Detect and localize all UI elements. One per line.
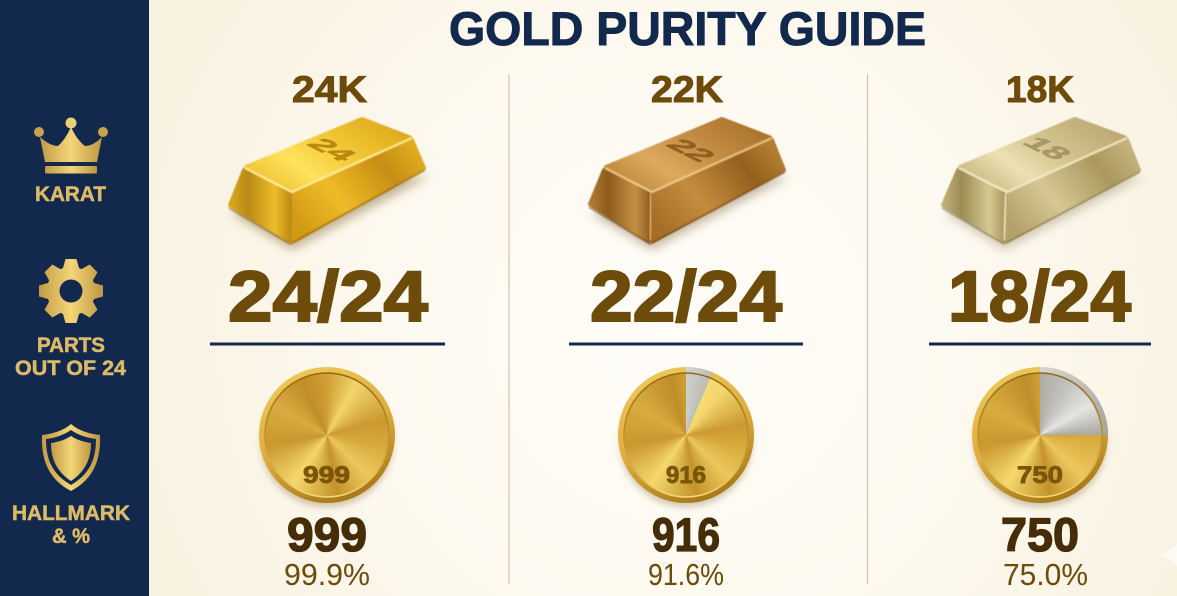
coin: 916 [618,367,754,507]
icon: 22K gold bar [589,119,790,250]
icon: shield [42,424,100,491]
fraction: 24/24: 24/24 [228,258,429,337]
icon: 18K gold bar: 18 [1016,133,1080,163]
coin: 750 [972,367,1108,507]
icon: 24K gold bar: 24 [300,134,365,165]
panel: 22K column [569,69,803,592]
percent: 99.9%: 99.9% [284,557,370,592]
panel: 18K column [929,69,1151,592]
label: parts out of 24: PARTS [37,333,105,357]
label: hallmark & % [12,501,130,548]
label: hallmark & %: HALLMARK [12,501,130,525]
coin: 750: 750 [1017,462,1063,489]
fraction: 18/24: 18/24 [948,258,1132,337]
label: hallmark & %: & % [52,524,90,548]
heading: 22K: 22K [651,69,723,110]
title: GOLD PURITY GUIDE [449,2,926,55]
heading: 24K: 24K [292,69,367,110]
percent: 91.6%: 91.6% [648,557,724,592]
panel: navy sidebar [0,0,149,596]
hallmark: 916: 916 [652,508,720,561]
heading: 18K: 18K [1006,69,1074,110]
label: karat: KARAT [35,182,106,206]
percent: 75.0%: 75.0% [1003,557,1088,592]
coin: 916: 916 [666,462,706,489]
hallmark: 999: 999 [287,508,367,561]
coin: 999 [259,367,395,507]
icon: 18K gold bar [942,119,1145,250]
column dividers [509,74,868,584]
panel: 24K column [210,69,445,592]
icon: 24K gold bar [229,119,430,250]
icon: gear [39,259,103,323]
label: parts out of 24 [15,333,126,380]
icon: crown [34,118,108,174]
coin: 999: 999 [303,462,350,489]
icon: 22K gold bar: 22 [659,135,723,165]
label: parts out of 24: OUT OF 24 [15,356,126,380]
fraction: 22/24: 22/24 [590,258,783,337]
hallmark: 750: 750 [1001,508,1079,561]
